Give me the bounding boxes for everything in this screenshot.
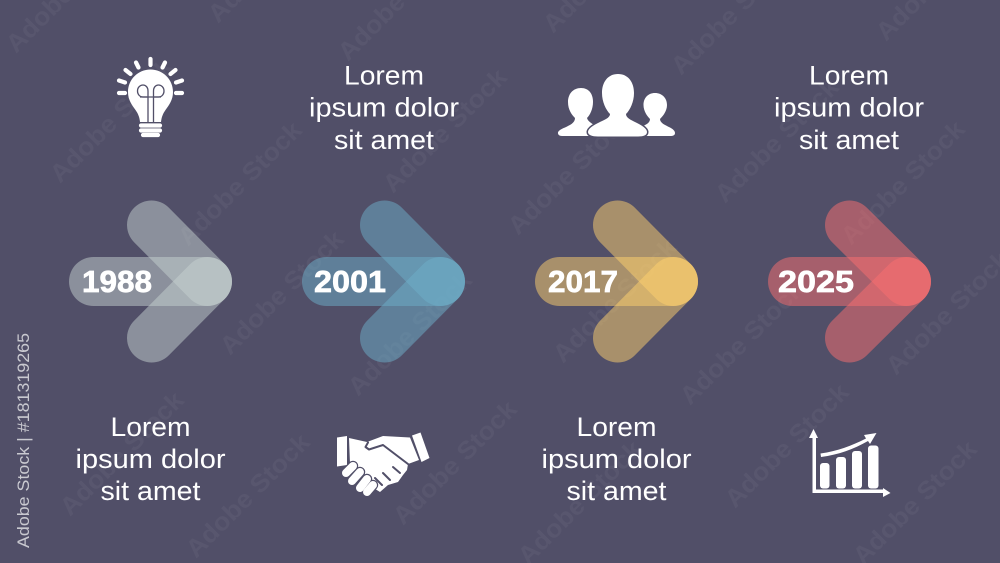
text block: column 2: Lorem bbox=[344, 60, 424, 90]
text: Adobe Stock bbox=[180, 428, 316, 563]
icon: group of people bbox=[558, 74, 675, 136]
text block: column 1: sit amet bbox=[100, 476, 201, 506]
year: 2001: 2001 bbox=[314, 264, 386, 299]
icon: handshake bbox=[337, 432, 430, 492]
text block: column 4: sit amet bbox=[799, 125, 900, 155]
text: Adobe Stock bbox=[377, 63, 513, 198]
year: 2017: 2017 bbox=[548, 264, 618, 299]
text: Adobe Stock bbox=[502, 105, 638, 240]
text block: column 3: Lorem bbox=[576, 412, 656, 442]
text block: column 1: Lorem bbox=[110, 412, 190, 442]
text block: column 2 bbox=[309, 60, 459, 155]
text: Adobe Stock bbox=[835, 115, 971, 250]
year: 2025: 2025 bbox=[778, 264, 854, 299]
text block: column 3: sit amet bbox=[566, 476, 667, 506]
text: Adobe Stock bbox=[44, 53, 180, 188]
text block: column 4: Lorem bbox=[809, 60, 889, 90]
text block: column 4 bbox=[774, 60, 924, 155]
text: Adobe Stock bbox=[709, 73, 845, 208]
text: Adobe Stock bbox=[387, 395, 523, 530]
text block: column 2: ipsum dolor bbox=[309, 92, 459, 122]
text: Adobe Stock bbox=[674, 275, 810, 410]
text block: column 3 bbox=[542, 412, 692, 506]
arrow: 2017 bbox=[548, 225, 674, 338]
watermark: stock id: Adobe Stock | #181319265 bbox=[14, 333, 33, 548]
text: Adobe Stock bbox=[547, 233, 683, 368]
arrow: 2025 bbox=[778, 225, 906, 338]
arrow: 1988 bbox=[82, 225, 208, 338]
text: Adobe Stock bbox=[719, 378, 855, 513]
arrow: 2001 bbox=[314, 225, 440, 338]
icon: growth bar chart bbox=[809, 429, 890, 497]
text: Adobe Stock bbox=[214, 225, 350, 360]
text: Adobe Stock bbox=[342, 266, 478, 401]
text block: column 1: ipsum dolor bbox=[76, 444, 226, 474]
text block: column 2: sit amet bbox=[334, 125, 435, 155]
icon: light bulb bbox=[119, 59, 182, 135]
text block: column 1 bbox=[76, 412, 226, 506]
text: Adobe Stock bbox=[172, 116, 308, 251]
text: Adobe Stock bbox=[54, 386, 190, 521]
text block: column 4: ipsum dolor bbox=[774, 92, 924, 122]
year: 1988: 1988 bbox=[82, 264, 152, 299]
text block: column 3: ipsum dolor bbox=[542, 444, 692, 474]
